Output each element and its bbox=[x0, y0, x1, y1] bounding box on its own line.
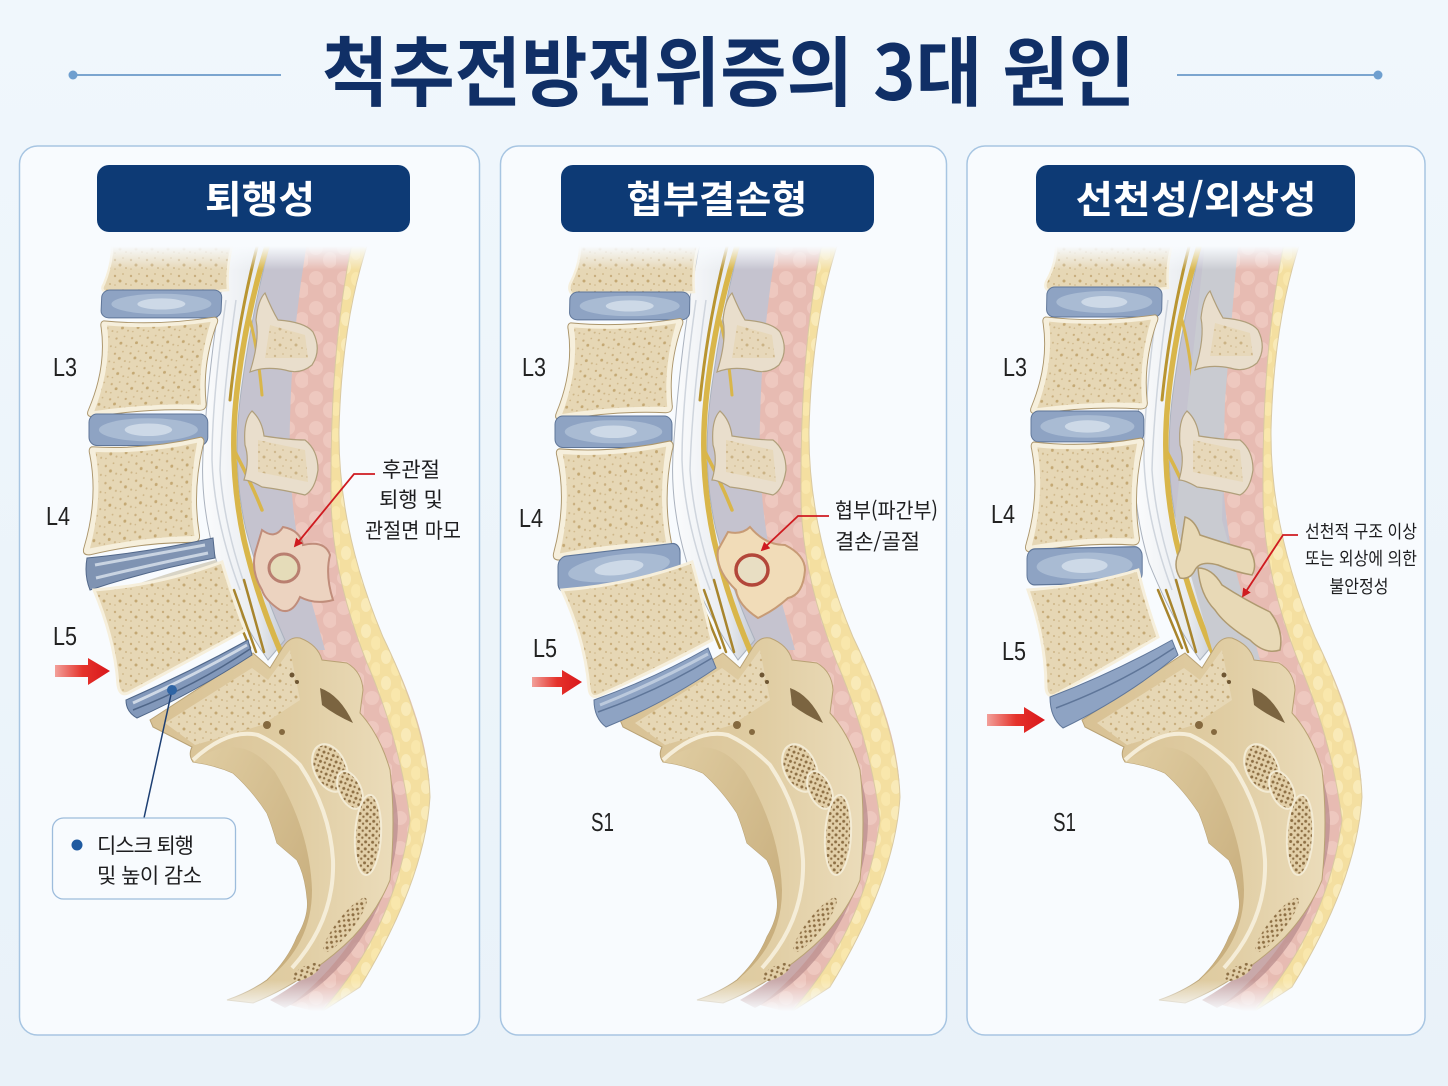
heading: 협부결손형: 협부결손형 bbox=[626, 169, 808, 224]
illustration: degenerative spine bbox=[23, 238, 475, 1022]
annotation: congenital or traumatic instability: 또는 외상에 의한 bbox=[1305, 545, 1417, 571]
annotation arrow bbox=[762, 516, 829, 550]
annotation: facet joint: 퇴행 및 bbox=[379, 484, 443, 514]
callout: disc degeneration bbox=[52, 685, 236, 899]
level labels: S1 bbox=[591, 807, 614, 837]
panel: 협부결손형 bbox=[500, 146, 946, 1035]
red arrow bbox=[55, 658, 110, 685]
annotation: congenital or traumatic instability: 선천적 구조 이상 bbox=[1305, 518, 1417, 544]
level labels: L5 bbox=[533, 633, 557, 663]
level labels: L3 bbox=[1003, 352, 1027, 382]
panel: 퇴행성 bbox=[20, 146, 480, 1035]
level labels: L4 bbox=[46, 501, 70, 531]
red arrow bbox=[987, 707, 1045, 733]
level labels: L5 bbox=[1002, 636, 1026, 666]
annotation: facet joint bbox=[365, 454, 461, 545]
level labels bbox=[991, 352, 1076, 837]
level labels: L4 bbox=[991, 499, 1015, 529]
annotation: pars defect bbox=[835, 495, 938, 556]
level labels: L3 bbox=[522, 352, 546, 382]
level labels: L4 bbox=[519, 503, 543, 533]
annotation: pars defect: 결손/골절 bbox=[835, 526, 920, 556]
level labels bbox=[46, 352, 77, 651]
heading: 선천성/외상성: 선천성/외상성 bbox=[1076, 169, 1316, 224]
heading: 협부결손형 bbox=[561, 165, 874, 232]
heading: 퇴행성: 퇴행성 bbox=[205, 169, 315, 224]
heading: 선천성/외상성 bbox=[1036, 165, 1355, 232]
level labels bbox=[519, 352, 614, 837]
level labels: L3 bbox=[53, 352, 77, 382]
title decoration right bbox=[1177, 70, 1382, 80]
annotation: congenital or traumatic instability bbox=[1305, 518, 1417, 599]
annotation: congenital or traumatic instability: 불안정성 bbox=[1330, 573, 1388, 599]
level labels: L5 bbox=[53, 621, 77, 651]
panel: 선천성/외상성 bbox=[967, 146, 1425, 1035]
callout: disc degeneration: 디스크 퇴행 bbox=[97, 830, 194, 860]
annotation: facet joint: 후관절 bbox=[382, 454, 440, 484]
annotation: facet joint: 관절면 마모 bbox=[365, 515, 461, 545]
heading: 퇴행성 bbox=[97, 165, 410, 232]
illustration: congenital/traumatic spine bbox=[971, 238, 1421, 1022]
title decoration left bbox=[68, 70, 281, 80]
level labels: S1 bbox=[1053, 807, 1076, 837]
annotation: pars defect: 협부(파간부) bbox=[835, 495, 938, 525]
callout: disc degeneration: 및 높이 감소 bbox=[97, 860, 202, 890]
annotation arrow bbox=[295, 474, 375, 546]
title: 척추전방전위증의 3대 원인 bbox=[322, 12, 1135, 122]
illustration: isthmic spine bbox=[504, 238, 942, 1022]
red arrow bbox=[532, 670, 582, 695]
annotation arrow bbox=[1243, 535, 1298, 596]
